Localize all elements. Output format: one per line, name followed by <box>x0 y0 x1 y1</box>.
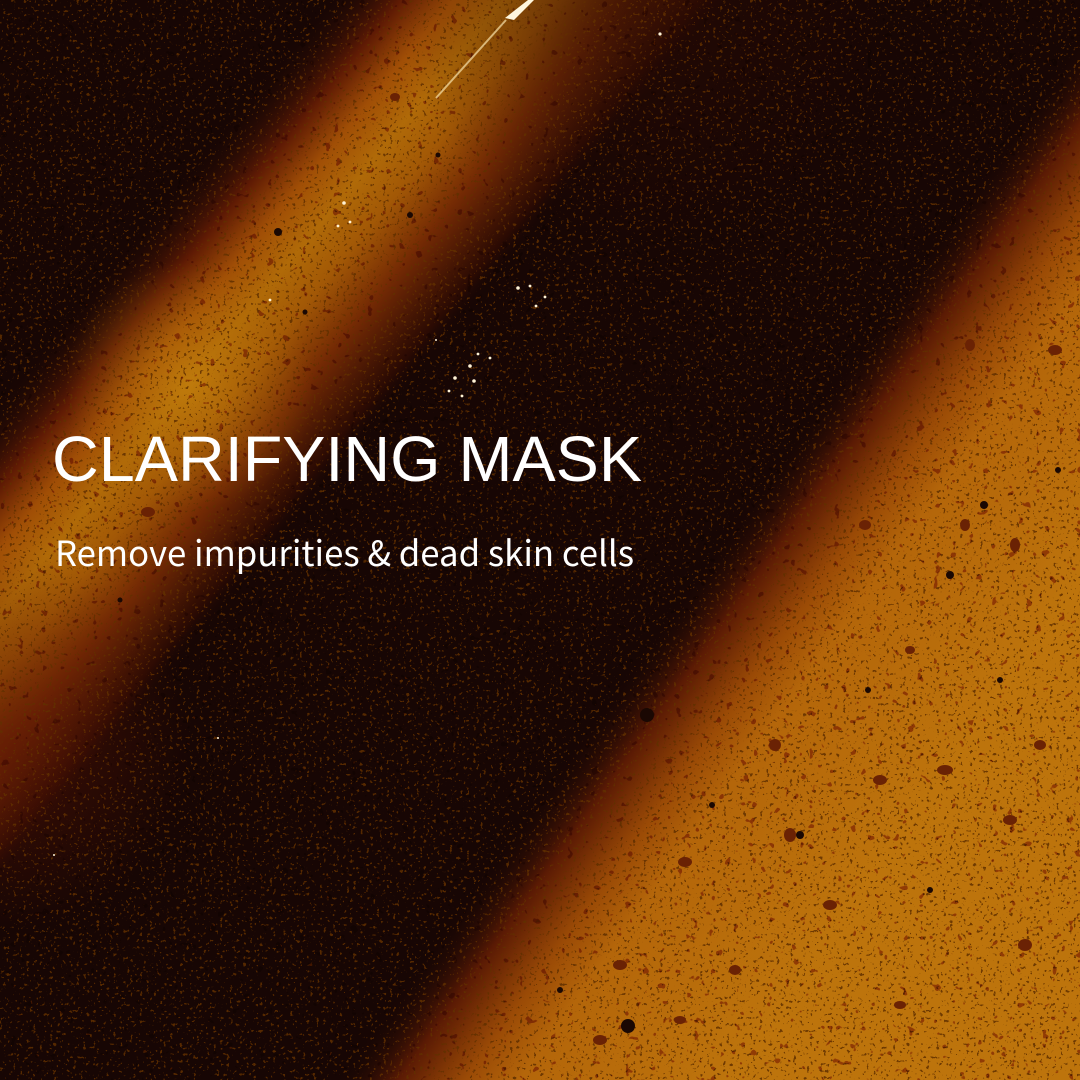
light glint streak, top <box>436 0 534 98</box>
title: CLARIFYING MASK <box>52 423 642 495</box>
large dark-red flecks <box>141 93 1062 1045</box>
small black flecks <box>118 152 1061 1033</box>
sparkle highlights <box>53 32 662 856</box>
subtitle: Remove impurities & dead skin cells <box>55 526 634 577</box>
